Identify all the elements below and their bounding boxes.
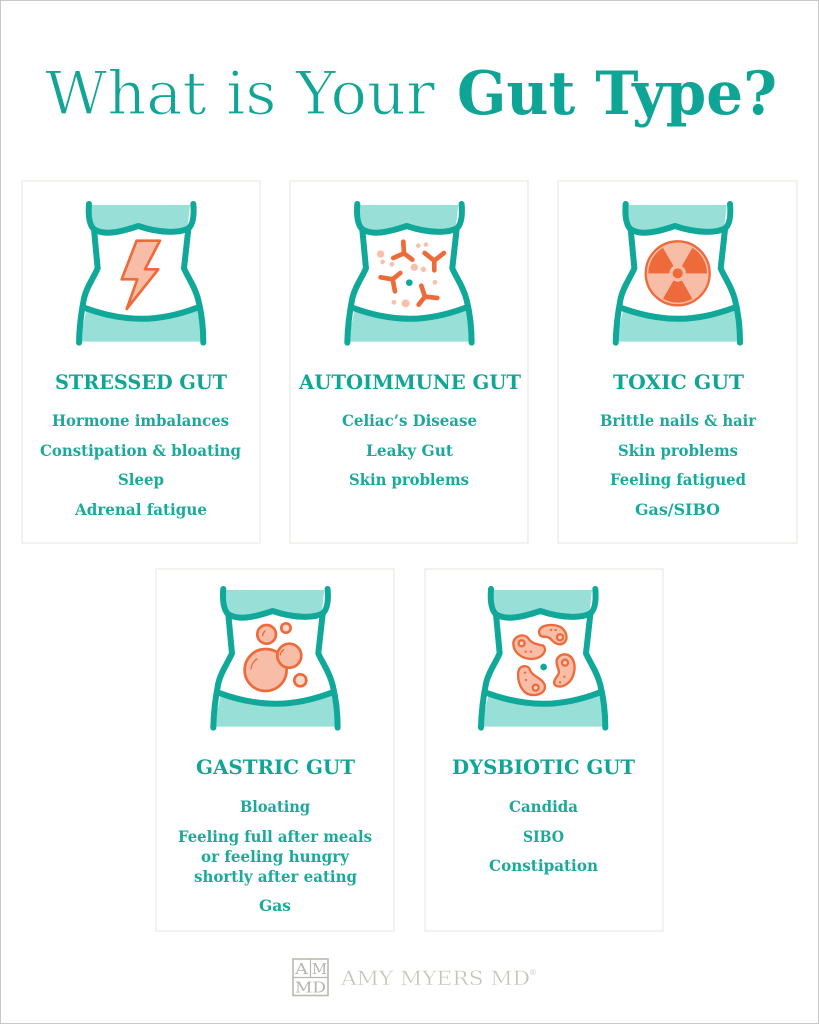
icon: torso with radiation symbol: [616, 204, 740, 343]
panel: autoimmune gut: [290, 181, 528, 543]
symptom list: Gas/SIBO: [635, 500, 720, 519]
symptom list: SIBO: [523, 827, 564, 846]
logo: Amy Myers MD: ®: [530, 968, 536, 977]
logo mark: A: [294, 962, 309, 978]
symptom list: Constipation: [489, 856, 598, 875]
symptom list: [342, 411, 477, 489]
heading: dysbiotic gut: DYSBIOTIC GUT: [452, 756, 635, 779]
logo mark: M: [312, 962, 327, 978]
panel: gastric gut: [156, 569, 394, 931]
symptom list: Leaky Gut: [366, 441, 454, 460]
symptom list: Candida: [509, 797, 578, 816]
title: What is Your: [45, 59, 435, 129]
symptom list: [40, 411, 241, 519]
logo mark: MD: [295, 980, 326, 996]
panel: stressed gut: [22, 181, 260, 543]
icon: torso with antibodies: [347, 204, 472, 343]
symptom list: Feeling fatigued: [610, 470, 746, 489]
icon: torso with lightning bolt: [79, 204, 203, 343]
logo: Amy Myers MD: [293, 959, 536, 996]
symptom list: Celiac’s Disease: [342, 411, 477, 430]
symptom list: [600, 411, 757, 519]
symptom list: shortly after eating: [194, 867, 357, 886]
heading: gastric gut: GASTRIC GUT: [196, 756, 355, 779]
symptom list: Skin problems: [349, 470, 469, 489]
symptom list: Feeling full after meals: [178, 827, 372, 846]
title: [45, 59, 777, 129]
icon: torso with bacteria: [481, 589, 605, 728]
symptom list: Sleep: [118, 470, 164, 489]
icon: torso with bubbles: [213, 589, 338, 728]
logo wordmark: AMY MYERS MD: [340, 967, 530, 990]
symptom list: [178, 797, 372, 915]
symptom list: Hormone imbalances: [52, 411, 229, 430]
symptom list: [489, 797, 598, 875]
heading: autoimmune gut: AUTOIMMUNE GUT: [298, 371, 521, 394]
symptom list: Skin problems: [618, 441, 738, 460]
symptom list: Constipation & bloating: [40, 441, 241, 460]
logo mark: [293, 959, 328, 996]
symptom list: or feeling hungry: [201, 847, 350, 866]
symptom list: Adrenal fatigue: [74, 500, 207, 519]
title: Gut Type?: [457, 59, 777, 129]
heading: stressed gut: STRESSED GUT: [55, 371, 227, 394]
heading: toxic gut: TOXIC GUT: [613, 371, 745, 394]
symptom list: Gas: [259, 896, 291, 915]
symptom list: Brittle nails & hair: [600, 411, 757, 430]
panel: dysbiotic gut: [425, 569, 663, 931]
symptom list: Bloating: [240, 797, 310, 816]
panel: toxic gut: [558, 181, 797, 543]
